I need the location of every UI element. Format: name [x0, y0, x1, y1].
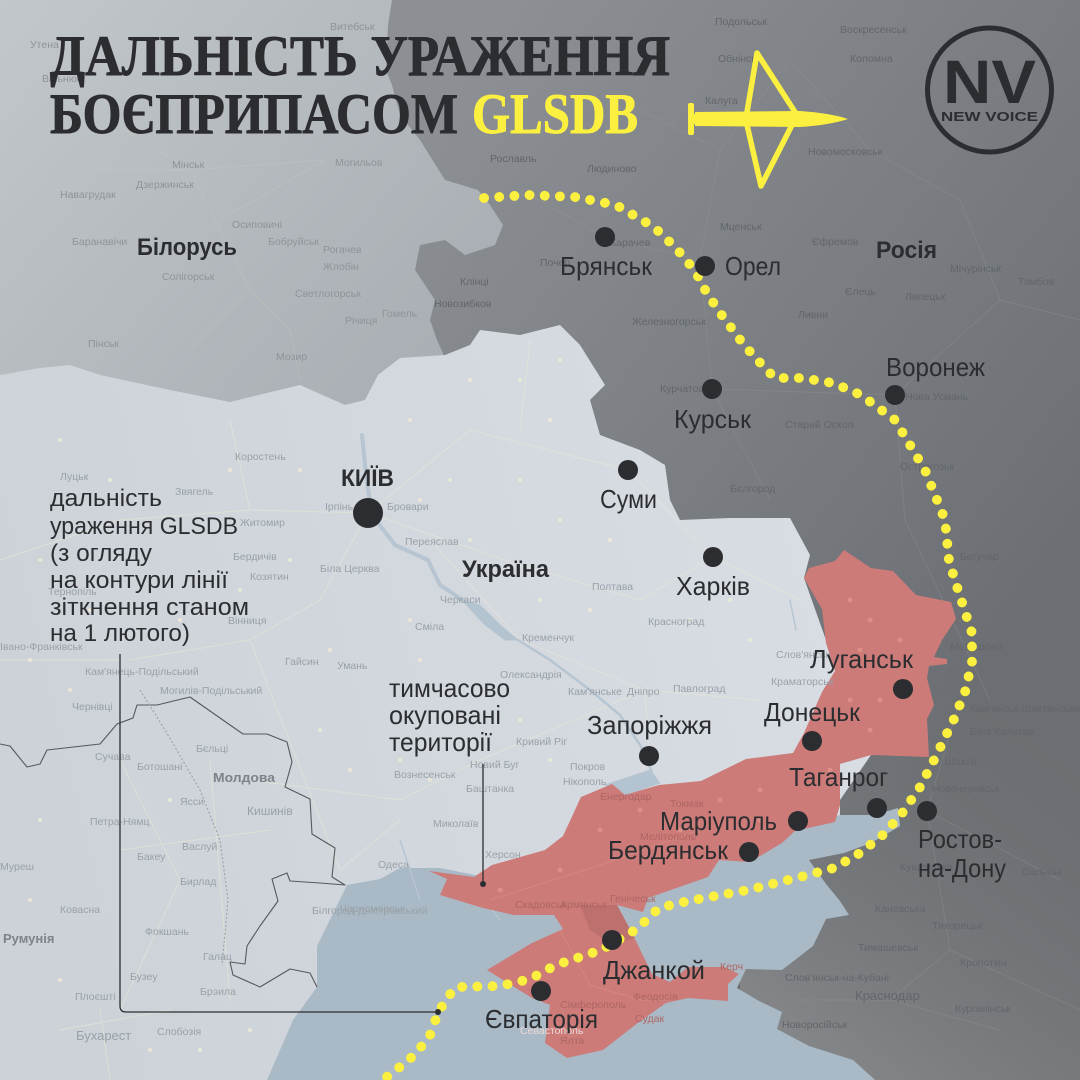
map place names: Рославль	[490, 153, 537, 165]
map place names: Переяслав	[405, 536, 459, 548]
map place names: Івано-Франківськ	[0, 641, 83, 653]
map place names: Кропоткін	[960, 957, 1007, 969]
occupied territories	[429, 550, 956, 1058]
map place names: Подольськ	[715, 16, 767, 28]
map place names: Новоросійськ	[782, 1019, 848, 1031]
map place names: Генічеськ	[610, 893, 656, 905]
map place names: Рогачев	[323, 244, 362, 256]
map place names: Вінниця	[228, 615, 266, 627]
map place names: Павлоград	[673, 683, 725, 695]
map rivers and lakes	[362, 435, 796, 920]
map place names: Тихорецьк	[932, 920, 983, 932]
map place names: Кишинів	[247, 804, 293, 818]
map place names: Ботошані	[137, 761, 182, 773]
map place names: Краматорськ	[771, 676, 834, 688]
map place names: Бровари	[387, 501, 429, 513]
map place names: Бирлад	[180, 876, 216, 888]
map place names: Богучар	[960, 551, 999, 563]
country and capital labels	[137, 234, 937, 583]
map place names: Солігорськ	[162, 271, 215, 283]
map place names: Вільнюс	[42, 73, 82, 85]
map place names: Керч	[720, 961, 743, 973]
map region: Black Sea and Sea of Azov	[267, 808, 900, 1080]
label: occupied territories: території	[389, 727, 492, 757]
map place names: Коростень	[235, 451, 286, 463]
map place names: Чорноморськ	[340, 903, 405, 915]
map place names: Судак	[635, 1013, 664, 1025]
map place names: Олександрія	[500, 669, 562, 681]
map place names: Бакеу	[137, 851, 166, 863]
map place names: Острогозьк	[900, 461, 955, 473]
map place names: Краснодар	[855, 988, 920, 1003]
map place names: Вознесенськ	[394, 769, 456, 781]
map place names: Тамбов	[1018, 276, 1055, 288]
country and capital labels: Росія	[876, 237, 937, 264]
label: GLSDB range note	[50, 485, 249, 647]
map place names: Пінськ	[88, 338, 119, 350]
map place names: Калуга	[705, 95, 738, 107]
map place names: Дніпро	[627, 686, 660, 698]
map place names: Почеп	[540, 257, 570, 269]
map place names: Херсон	[485, 849, 521, 861]
map place names: Слобозія	[157, 1026, 201, 1038]
map place names: Міллерово	[950, 641, 1002, 653]
city labels: Таганрог	[789, 762, 888, 792]
city labels: Бердянськ	[608, 835, 729, 865]
map place names: Утена	[30, 39, 59, 51]
map place names: Старий Оскол	[785, 419, 853, 431]
map place names: Кременчук	[522, 632, 574, 644]
map place names: Красноград	[648, 616, 704, 628]
label: occupied territories	[389, 673, 510, 757]
label: GLSDB range note: дальність	[50, 485, 162, 512]
map place names: Кущевська	[900, 861, 953, 873]
city markers	[353, 227, 937, 1001]
map place names: Дзержинськ	[136, 179, 194, 191]
map place names: Клінці	[460, 276, 489, 288]
city labels: Джанкой	[603, 955, 705, 985]
map place names: Воскресенськ	[840, 24, 907, 36]
map place names: Ясси	[180, 796, 204, 808]
map place names: Нікополь	[563, 776, 607, 788]
map place names: Коломна	[850, 53, 893, 65]
city labels: Суми	[600, 484, 657, 514]
map place names: Сальськ	[1022, 866, 1063, 878]
label: occupied territories: окуповані	[389, 700, 501, 730]
logo: NV New Voice: NEW VOICE	[941, 109, 1038, 124]
map place names: Сімферополь	[560, 999, 627, 1011]
map place names: Галац	[203, 951, 232, 963]
map place names: Єфремов	[812, 236, 859, 248]
city labels: Луганськ	[810, 644, 914, 674]
map place names: Річиця	[345, 315, 377, 327]
map place names: Слов'янськ	[776, 649, 830, 661]
callout line: range label to path	[120, 654, 441, 1015]
map place names: Армянськ	[560, 899, 607, 911]
map place names: Железногорськ	[632, 316, 706, 328]
map place names: Бердичів	[233, 551, 277, 563]
map place names: Людиново	[587, 163, 637, 175]
country and capital labels: КИЇВ	[341, 465, 394, 492]
map place names: Гомель	[382, 308, 418, 320]
city labels: Воронеж	[886, 352, 986, 382]
map place names: Скадовськ	[515, 899, 566, 911]
city labels: Харків	[676, 571, 750, 601]
map place names: Баштанка	[466, 783, 514, 795]
map place names: Мценськ	[720, 221, 762, 233]
map place names: Миколаїв	[433, 818, 479, 830]
city labels: Донецьк	[764, 697, 861, 727]
title	[50, 25, 670, 146]
map place names: Єлець	[845, 286, 877, 298]
map place names: Светлогорськ	[295, 288, 361, 300]
map place names: Ірпінь	[325, 501, 354, 513]
map place names: Кам'янське	[568, 686, 622, 698]
map place names: Муреш	[0, 861, 34, 873]
map place names: Петра-Нямц	[90, 816, 150, 828]
map place names: Плоєшті	[75, 991, 116, 1003]
city labels: Запоріжжя	[587, 710, 712, 740]
map place names: Новозибков	[434, 298, 492, 310]
map place names: Сучава	[95, 751, 131, 763]
map place names: Бєлгород	[730, 483, 775, 495]
map place names: Ливни	[798, 309, 828, 321]
map place names: Мозир	[276, 351, 307, 363]
map place names: Мінськ	[172, 159, 205, 171]
logo: NV New Voice: NV	[943, 48, 1036, 116]
city labels	[485, 251, 1006, 1034]
map place names: Новий Буг	[470, 759, 520, 771]
map place names: Луцьк	[60, 471, 89, 483]
city labels: Маріуполь	[660, 806, 777, 836]
icon: GLSDB glide bomb	[688, 53, 848, 186]
map place names: Фокшань	[145, 926, 189, 938]
map place names: Покров	[570, 761, 606, 773]
map place names: Чернівці	[72, 701, 113, 713]
map place names: Умань	[337, 660, 368, 672]
map region: Ukraine, Moldova and Romania	[0, 325, 871, 1080]
callout line: occupied territories	[480, 764, 486, 887]
label: GLSDB range note: на 1 лютого)	[50, 620, 190, 647]
map place names: Молдова	[213, 770, 276, 785]
map place names: Кам'янець-Подільський	[85, 666, 199, 678]
map place names: Нова Усмань	[905, 391, 969, 403]
map place names: Могильов	[335, 157, 383, 169]
map place names: Біла Церква	[320, 563, 380, 575]
map region: Belarus and north-west	[0, 0, 503, 430]
city labels: Ростов-	[918, 824, 1002, 854]
map settlements: light specks	[30, 360, 750, 1050]
map place names: Навагрудак	[60, 189, 116, 201]
map place names: Сміла	[415, 621, 444, 633]
label: GLSDB range note: на контури лінії	[50, 567, 228, 594]
title: ДАЛЬНІСТЬ УРАЖЕННЯ	[50, 25, 670, 88]
range line: GLSDB dotted path	[384, 195, 972, 1079]
map place names: Баранавічи	[72, 236, 127, 248]
city labels: Курськ	[674, 404, 752, 434]
map place names: Мелітополь	[640, 831, 697, 843]
map place names: Кривий Ріг	[516, 736, 567, 748]
label: GLSDB range note: ураження GLSDB	[50, 513, 238, 540]
map place names: Житомир	[240, 517, 285, 529]
map place names: Шахти	[945, 756, 976, 768]
map place names: Обнінськ	[718, 53, 762, 65]
map place names: Тимашевськ	[858, 942, 918, 954]
map place names: Васлуй	[182, 841, 217, 853]
map place names: Токмак	[670, 798, 704, 810]
title: БОЄПРИПАСОМ	[50, 83, 458, 146]
map place names: Новомосковськ	[808, 146, 883, 158]
city labels: на-Дону	[918, 853, 1006, 883]
country and capital labels: Білорусь	[137, 234, 237, 261]
map place names: Каневська	[875, 903, 926, 915]
city labels: Євпаторія	[485, 1004, 598, 1034]
map place names: Бобруйськ	[268, 236, 319, 248]
country and capital labels: Україна	[462, 556, 550, 583]
map place names: Енергодар	[600, 791, 652, 803]
map place names: Одеса	[378, 859, 409, 871]
map place names: Жлобін	[323, 261, 359, 273]
map place names: Курганінськ	[955, 1003, 1011, 1015]
map place names: Брэила	[200, 986, 236, 998]
map place names: Черкаси	[440, 594, 481, 606]
logo: NV New Voice	[928, 28, 1052, 152]
map place names: Карачев	[610, 237, 651, 249]
map place names: Бєльці	[196, 743, 228, 755]
map place names: Тернопіль	[48, 586, 97, 598]
map place names: Полтава	[592, 581, 633, 593]
label: GLSDB range note: зіткнення станом	[50, 594, 249, 621]
map place names: Витебськ	[330, 21, 375, 33]
map place names: Звягель	[175, 486, 214, 498]
city labels: Орел	[725, 251, 781, 281]
map place names: Білгород-Дністровський	[312, 905, 427, 917]
map place names: Курчатов	[660, 383, 704, 395]
map place names: Бухарест	[76, 1028, 131, 1043]
map place names: Бузеу	[130, 971, 158, 983]
map place names: Козятин	[250, 571, 289, 583]
map place names: Осиповичі	[232, 219, 282, 231]
map place names: Слов'янськ-на-Кубані	[785, 972, 889, 984]
title: GLSDB	[472, 83, 638, 146]
map place names: Севастополь	[520, 1025, 584, 1037]
map place names: Гайсин	[285, 656, 319, 668]
map place names: Липецьк	[905, 291, 946, 303]
map place names: Біла Калитва	[970, 726, 1034, 738]
map place names: Могилів-Подільський	[160, 685, 262, 697]
map place names: Феодосія	[633, 991, 678, 1003]
map border: Moldova and Romania	[0, 690, 345, 987]
map place names: Румунія	[3, 931, 54, 946]
map place names: Ковасна	[60, 904, 100, 916]
label: occupied territories: тимчасово	[389, 673, 510, 703]
label: GLSDB range note: (з огляду	[50, 540, 152, 567]
city labels: Брянськ	[560, 251, 653, 281]
map place names: Мічурінськ	[950, 263, 1001, 275]
map place names: Ялта	[560, 1035, 584, 1047]
map place names: Новочеркаськ	[932, 783, 1000, 795]
